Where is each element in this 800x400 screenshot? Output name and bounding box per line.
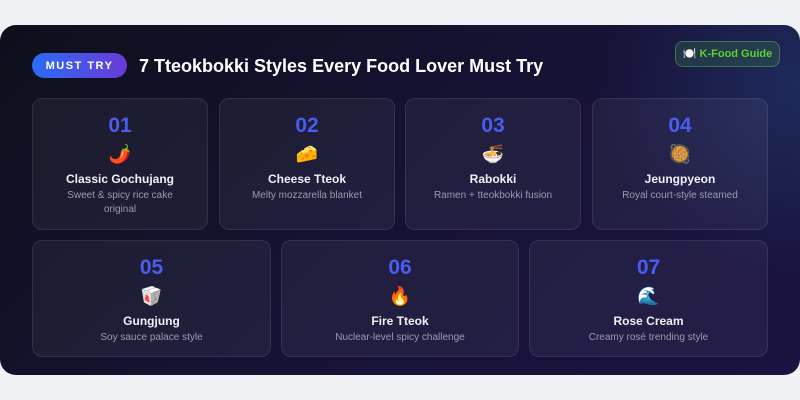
card 01: 🌶️ <box>109 144 131 164</box>
card 05: 05 <box>140 256 163 279</box>
card 04 <box>592 98 768 230</box>
card 04: 04 <box>668 114 692 137</box>
card 04: Royal court-style steamed <box>622 190 738 201</box>
card 06: Fire Tteok <box>371 314 429 328</box>
card 03: 🍜 <box>482 144 504 164</box>
tag: K-Food Guide: 🍽️ K-Food Guide <box>683 48 772 60</box>
card 05: 🥡 <box>140 286 163 306</box>
badge: must try: MUST TRY <box>46 60 113 72</box>
card 02: 02 <box>295 114 319 137</box>
card 07 <box>529 240 768 357</box>
card 07: Creamy rosé trending style <box>589 332 708 343</box>
card 06: 🔥 <box>389 286 411 306</box>
card 03: 03 <box>481 114 505 137</box>
card 01: Sweet & spicy rice cake original <box>67 190 173 215</box>
card 01: 01 <box>108 114 132 137</box>
card 05 <box>32 240 271 357</box>
card 03: Ramen + tteokbokki fusion <box>434 190 552 201</box>
card 06: 06 <box>388 256 412 279</box>
card 03 <box>405 98 581 230</box>
card 03: Rabokki <box>470 172 516 186</box>
card 02: Melty mozzarella blanket <box>252 190 362 201</box>
tag: K-Food Guide <box>675 41 780 67</box>
card 05: Soy sauce palace style <box>100 332 203 343</box>
card 01 <box>32 98 208 230</box>
card 04: Jeungpyeon <box>645 172 715 186</box>
badge: must try <box>32 53 127 78</box>
title: 7 Tteokbokki Styles Every Food Lover Must Try <box>139 56 543 76</box>
card 01: Classic Gochujang <box>66 172 174 186</box>
card 05: Gungjung <box>123 314 180 328</box>
card 07: 🌊 <box>637 286 660 306</box>
card 02: 🧀 <box>296 144 318 164</box>
card 02: Cheese Tteok <box>268 172 346 186</box>
card 06: Nuclear-level spicy challenge <box>335 332 465 343</box>
card 02 <box>219 98 395 230</box>
card 06 <box>281 240 519 357</box>
card 07: Rose Cream <box>613 314 684 328</box>
card 07: 07 <box>637 256 660 279</box>
card 04: 🥘 <box>669 144 691 164</box>
